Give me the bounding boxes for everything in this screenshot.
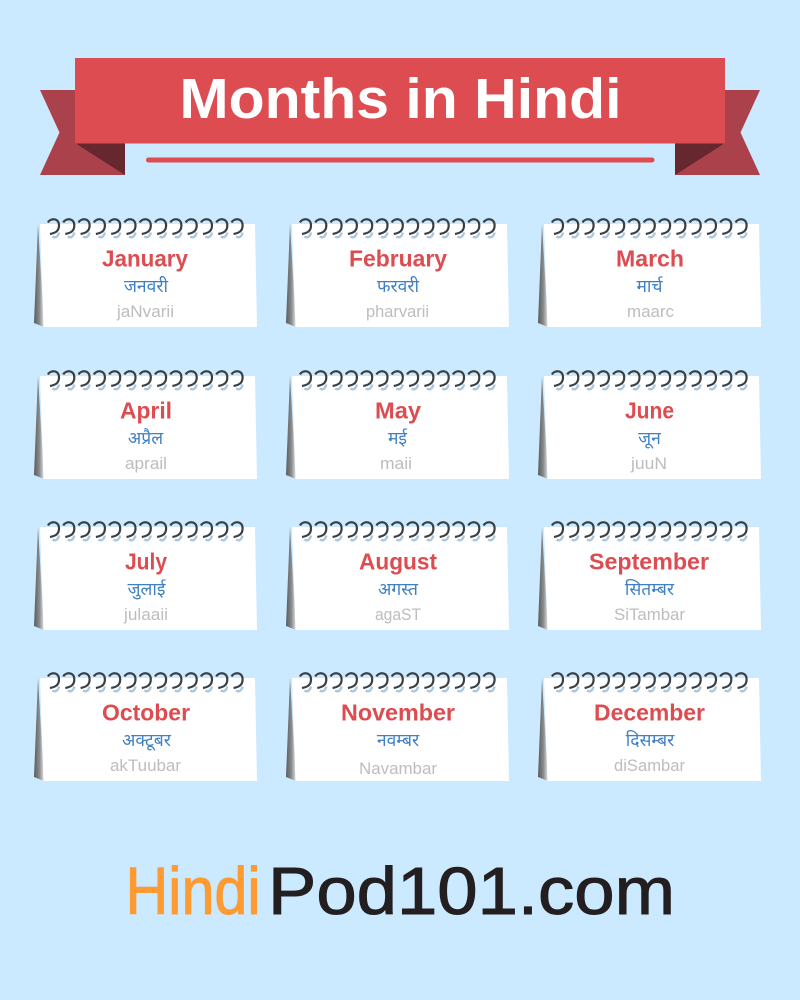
month name: December <box>594 700 705 726</box>
transliteration: Navambar <box>359 760 438 778</box>
month name: January <box>102 246 188 272</box>
month name: November <box>341 700 455 726</box>
card: September <box>538 522 761 630</box>
Hindi word: नवम्बर <box>377 731 420 754</box>
Hindi word: अप्रैल <box>128 427 164 452</box>
month name: March <box>616 246 684 272</box>
ribbon left tail <box>40 90 125 175</box>
month name: May <box>375 398 421 424</box>
transliteration: juuN <box>630 455 667 473</box>
card: January <box>34 219 257 327</box>
title banner <box>40 58 760 175</box>
card: March <box>538 219 761 327</box>
month name: April <box>120 398 172 424</box>
transliteration: SiTambar <box>614 606 686 624</box>
logo part: Pod101.com: Pod101.com <box>268 854 675 929</box>
Hindi word: फरवरी <box>377 276 419 300</box>
card: November <box>286 673 509 781</box>
Hindi word: जुलाई <box>128 579 167 603</box>
card: June <box>538 371 761 479</box>
transliteration: aprail <box>125 455 167 473</box>
transliteration: diSambar <box>614 757 685 775</box>
month name: June <box>625 398 674 424</box>
card: October <box>34 673 257 781</box>
Hindi word: जनवरी <box>124 276 169 300</box>
Hindi word: सितम्बर <box>625 579 675 603</box>
title: Months in Hindi <box>180 67 622 131</box>
card: December <box>538 673 761 781</box>
transliteration: jaNvarii <box>116 303 174 321</box>
Hindi word: जून <box>638 429 661 452</box>
Hindi word: मार्च <box>636 276 664 300</box>
ribbon right fold <box>675 143 725 175</box>
transliteration: maii <box>380 455 412 473</box>
card: May <box>286 371 509 479</box>
Hindi word: अगस्त <box>378 580 419 603</box>
card: July <box>34 522 257 630</box>
transliteration: agaST <box>375 606 421 624</box>
Hindi word: दिसम्बर <box>626 730 675 754</box>
transliteration: maarc <box>627 303 674 321</box>
transliteration: julaaii <box>123 606 168 624</box>
month name: October <box>102 700 190 726</box>
transliteration: pharvarii <box>366 303 429 321</box>
Hindi word: अक्टूबर <box>122 731 172 754</box>
transliteration: akTuubar <box>110 757 182 775</box>
ribbon right tail <box>675 90 760 175</box>
card: April <box>34 371 257 479</box>
title underline <box>146 158 654 162</box>
logo part: Hindi: Hindi <box>126 854 260 929</box>
logo: HindiPod101.com <box>126 854 675 929</box>
ribbon main band <box>75 58 725 144</box>
month name: August <box>359 548 437 574</box>
card: February <box>286 219 509 327</box>
ribbon left fold <box>75 143 125 175</box>
Hindi word: मई <box>388 428 408 452</box>
month name: February <box>349 246 447 272</box>
month name: July <box>125 548 167 574</box>
card: August <box>286 522 509 630</box>
month name: September <box>589 548 709 574</box>
